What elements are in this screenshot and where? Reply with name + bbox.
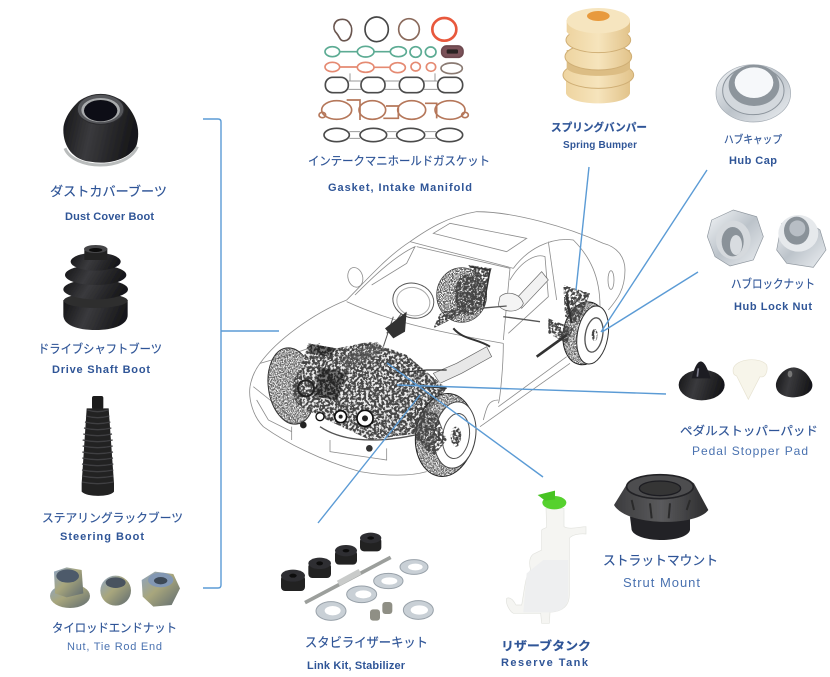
- label: hub cap: ハブキャップ: [724, 132, 782, 146]
- label: drive shaft boot: ドライブシャフトブーツ: [38, 341, 162, 356]
- engine block: [298, 342, 447, 452]
- icon: spring bumper: [563, 8, 634, 103]
- panel: drive shaft boot: [38, 245, 162, 376]
- car cutaway illustration: [250, 212, 625, 480]
- label: hub lock nut: ハブロックナット: [731, 276, 815, 291]
- panel: hub cap: [716, 65, 791, 167]
- label: hub cap english: Hub Cap: [729, 155, 777, 167]
- icon: hub cap: [716, 65, 791, 122]
- icon: link kit: [281, 533, 433, 621]
- icon: drive shaft boot: [63, 245, 128, 330]
- panel: pedal stopper pad: [679, 360, 818, 458]
- panel: dust cover boot: [50, 94, 167, 223]
- label: steering boot: ステアリングラックブーツ: [42, 510, 183, 525]
- panel: strut mount: [603, 475, 718, 590]
- label: pedal stopper pad english: Pedal Stopper Pad: [692, 444, 808, 458]
- label: spring bumper english: Spring Bumper: [563, 140, 637, 151]
- label: intake manifold gasket: インテークマニホールドガスケット: [308, 154, 490, 168]
- steering wheel and column: [383, 279, 438, 347]
- leader: hub lock nut: [602, 272, 698, 332]
- leader: reserve tank: [387, 363, 543, 477]
- panel: hub lock nut: [707, 210, 826, 313]
- icon: dust cover boot: [63, 94, 138, 165]
- panel: spring bumper: [551, 8, 647, 151]
- label: strut mount english: Strut Mount: [623, 575, 700, 590]
- leader: link kit stabilizer: [318, 395, 420, 523]
- bracket for boots and nut group: [203, 119, 279, 588]
- front left tyre: [263, 345, 320, 427]
- icon: steering boot: [82, 396, 114, 496]
- label: hub lock nut english: Hub Lock Nut: [734, 301, 812, 313]
- icon: pedal stopper pads: [679, 360, 812, 400]
- panel: reserve tank: [501, 491, 591, 669]
- label: reserve tank english: Reserve Tank: [501, 657, 589, 669]
- label: pedal stopper pad: ペダルストッパーパッド: [680, 423, 818, 438]
- leader lines and bracket: [203, 119, 707, 588]
- car body outline: [250, 212, 625, 475]
- label: stabilizer kit: スタビライザーキット: [305, 635, 428, 650]
- icon: hub lock nuts: [707, 210, 826, 267]
- label: tie rod end nut english: Nut, Tie Rod End: [67, 641, 162, 653]
- icon: gasket set: [319, 17, 468, 142]
- icon: reserve tank: [506, 491, 586, 623]
- label: reserve tank: リザーブタンク: [501, 638, 591, 653]
- label: steering boot english: Steering Boot: [60, 531, 144, 543]
- exhaust and muffler: [433, 272, 548, 383]
- label: gasket english: Gasket, Intake Manifold: [328, 182, 472, 194]
- leader: hub cap: [601, 170, 707, 332]
- spare wheel: [433, 265, 492, 328]
- leader: pedal stopper pad: [397, 385, 666, 394]
- front right wheel: [407, 390, 480, 480]
- label: tie rod end nut: タイロッドエンドナット: [52, 621, 177, 635]
- panel: intake manifold gasket: [308, 17, 490, 194]
- icon: strut mount: [614, 475, 708, 540]
- panel: steering boot: [42, 396, 183, 543]
- panel: stabilizer link kit: [281, 533, 433, 672]
- panel: tie rod end nuts: [50, 567, 180, 653]
- leader: spring bumper: [576, 167, 589, 290]
- label: drive shaft boot english: Drive Shaft Boot: [52, 364, 150, 376]
- label: spring bumper: スプリングバンパー: [551, 120, 647, 134]
- label: link kit english: Link Kit, Stabilizer: [307, 660, 406, 672]
- label: dust cover boot: ダストカバーブーツ: [50, 184, 167, 199]
- label: dust cover boot english: Dust Cover Boot: [65, 211, 154, 223]
- rear suspension and wheel: [537, 285, 613, 368]
- icon: tie rod end nuts: [50, 567, 180, 608]
- label: strut mount: ストラットマウント: [603, 553, 718, 568]
